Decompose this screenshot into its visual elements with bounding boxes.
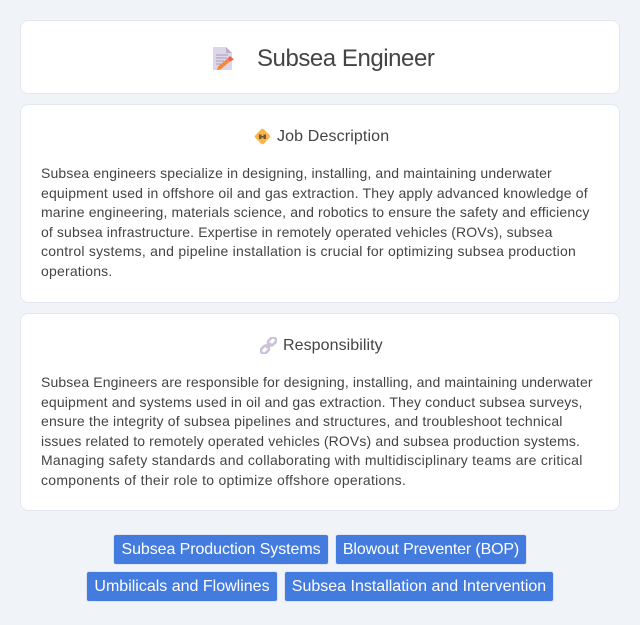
tag: Umbilicals and Flowlines (87, 572, 277, 601)
tag: Umbilicals and Flowlines: Umbilicals and Flowlines (94, 578, 270, 595)
text: responsibility: issues related to remotely operated vehicles (ROVs) and subsea production systems. (41, 432, 580, 448)
panel: title card (20, 20, 620, 94)
heading: job description: Job Description (277, 128, 389, 145)
text: responsibility: ensure the integrity of subsea pipelines and structures, and troubleshoot technical (41, 413, 563, 429)
tag: Blowout Preventer (BOP): Blowout Preventer (BOP) (343, 541, 519, 558)
text: job description (41, 165, 590, 279)
text: responsibility: components of their role to optimize offshore operations. (41, 472, 406, 488)
heading: responsibility: Responsibility (283, 337, 383, 354)
title: Subsea Engineer (257, 45, 434, 72)
text: job description: control systems, and pipeline installation is crucial for optimizing subsea production (41, 243, 576, 259)
text: job description: equipment used in offshore oil and gas extraction. They apply advanced knowledge of (41, 184, 588, 200)
tag: Subsea Production Systems: Subsea Production Systems (122, 541, 320, 558)
text: job description: of subsea infrastructure. Expertise in remotely operated vehicles (ROVs), subsea (41, 224, 552, 240)
text: job description: operations. (41, 262, 112, 278)
tag: Subsea Installation and Intervention (285, 572, 553, 601)
panel: job description (20, 104, 620, 303)
tag: Subsea Production Systems (114, 535, 328, 564)
text: responsibility (41, 374, 593, 488)
icon: chain link (260, 337, 277, 354)
text: responsibility: equipment and systems used in oil and gas extraction. They conduct subsea surveys, (41, 394, 583, 410)
text: job description: marine engineering, materials science, and robotics to ensure the safety and efficiency (41, 204, 590, 220)
tag: Blowout Preventer (BOP) (336, 535, 526, 564)
tag: Subsea Installation and Intervention: Subsea Installation and Intervention (292, 578, 546, 595)
text: responsibility: Managing safety standards and collaborating with multidisciplinary teams are critical (41, 452, 583, 468)
text: job description: Subsea engineers specialize in designing, installing, and maintaining underwater (41, 165, 552, 181)
panel: responsibility (20, 313, 620, 511)
icon: document with pencil (213, 47, 234, 70)
icon: orange diamond (254, 128, 270, 144)
text: responsibility: Subsea Engineers are responsible for designing, installing, and maintaining underwater (41, 374, 593, 390)
